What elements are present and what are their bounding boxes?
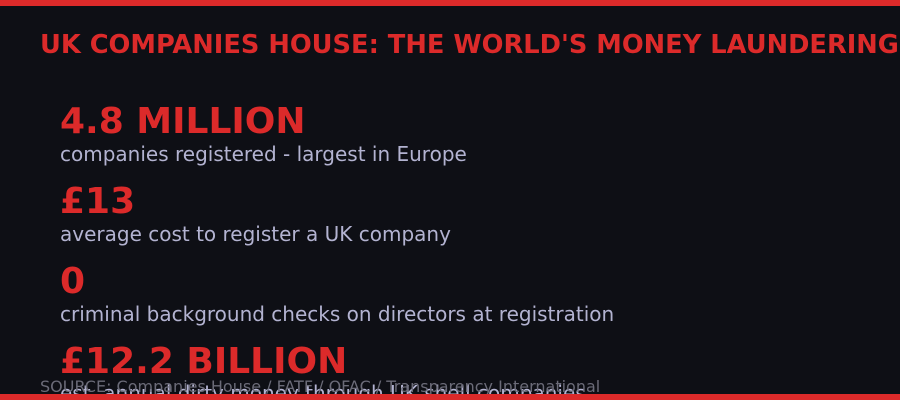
stat: companies: 4.8 MILLION bbox=[60, 101, 306, 142]
source note: SOURCE: Companies House / FATF / OFAC / Transparency International bbox=[40, 377, 600, 396]
top accent bar bbox=[0, 0, 900, 6]
stat: checks: 0 bbox=[60, 261, 85, 302]
stat: checks: criminal background checks on directors at registration bbox=[60, 302, 614, 326]
stat: cost: average cost to register a UK company bbox=[60, 222, 451, 246]
stat: dirty money bbox=[60, 344, 586, 394]
stat: cost bbox=[60, 181, 451, 246]
stat: companies: companies registered - largest in Europe bbox=[60, 142, 467, 166]
stat: cost: £13 bbox=[60, 181, 135, 222]
bottom accent bar bbox=[0, 394, 900, 400]
stat: companies bbox=[60, 101, 467, 166]
stat: checks bbox=[60, 261, 614, 326]
